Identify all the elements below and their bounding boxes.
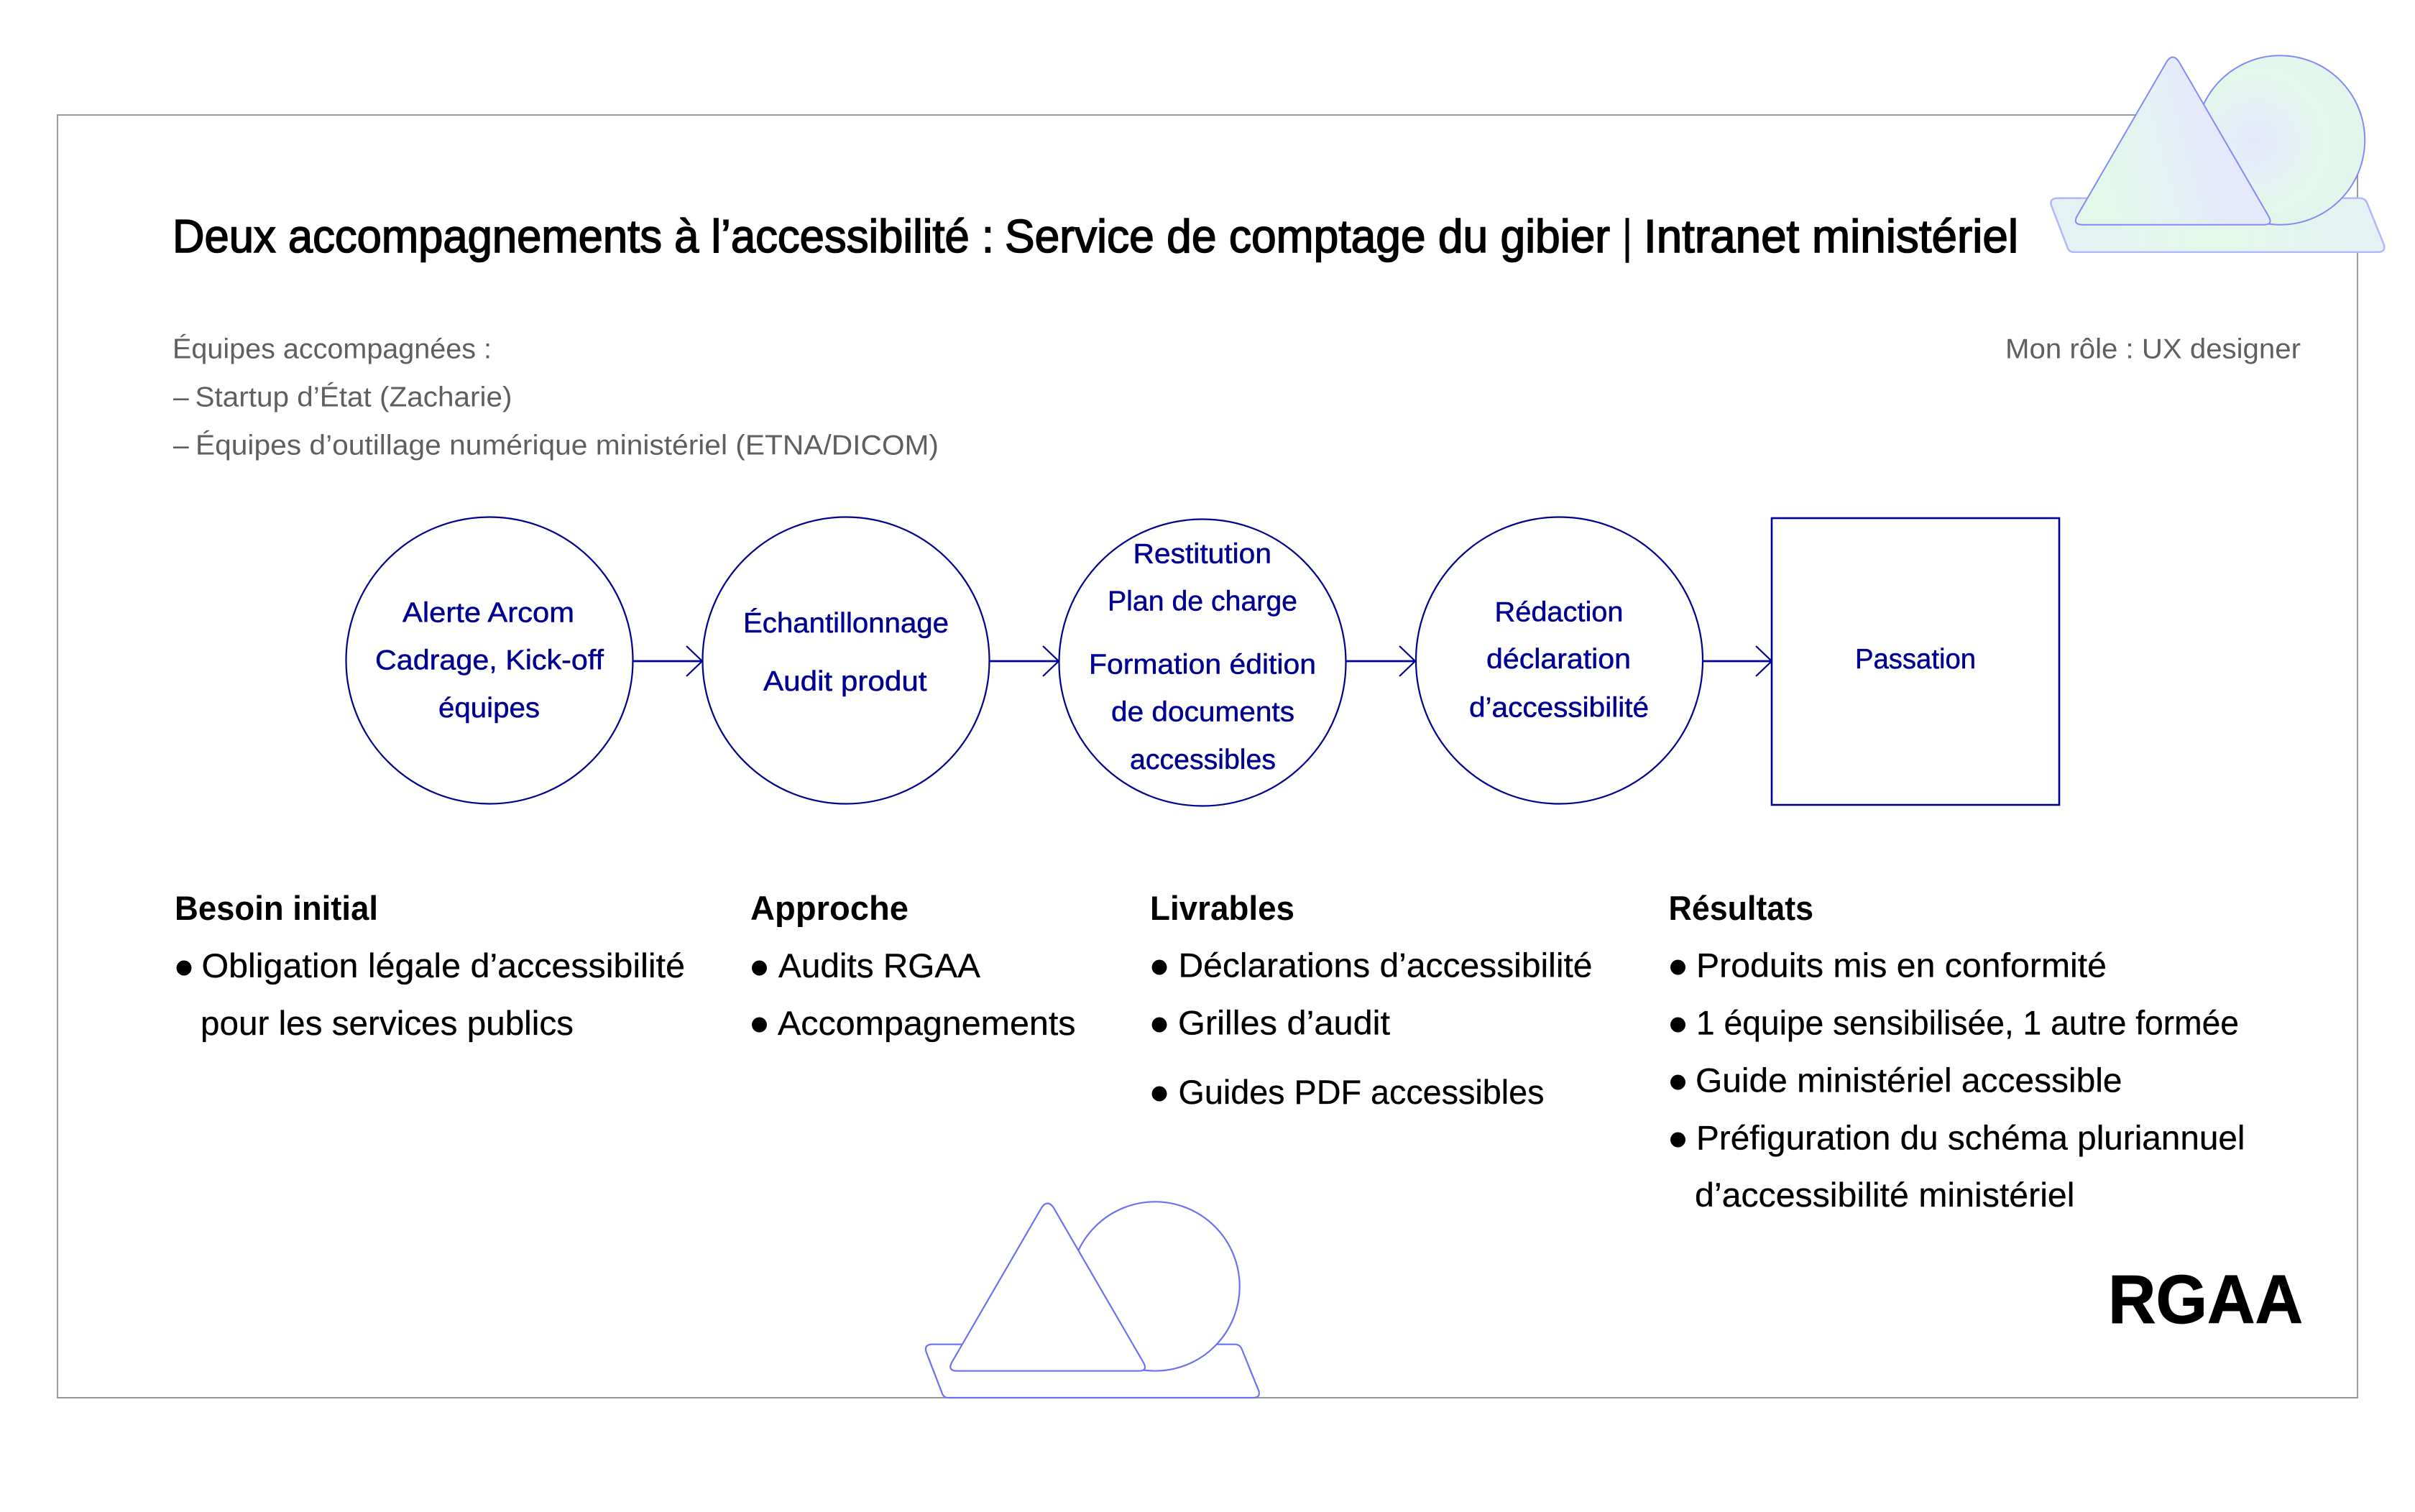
step 4: redaction: déclaration xyxy=(1486,644,1631,675)
step 3: restitution: Formation édition xyxy=(1089,650,1316,680)
column: livrables xyxy=(1150,889,1593,1111)
title: Intranet ministériel xyxy=(1644,210,2018,262)
title: Deux accompagnements à l’accessibilité : xyxy=(172,210,994,262)
process flow xyxy=(346,517,2059,806)
step 2: audit: Audit produt xyxy=(763,666,927,697)
step 3: restitution: Restitution xyxy=(1133,539,1271,569)
list: besoin initial xyxy=(177,946,685,1042)
title: Service de comptage du gibier xyxy=(1005,210,1610,262)
column: besoin initial xyxy=(175,889,685,1042)
arrow 2 xyxy=(990,646,1059,676)
list: resultats xyxy=(1670,946,2245,1214)
step 1: alerte: Alerte Arcom xyxy=(402,598,574,628)
RGAA label: RGAA xyxy=(2108,1261,2303,1338)
step 5: passation xyxy=(1772,518,2059,805)
list: resultats: 1 équipe sensibilisée, 1 autre formée xyxy=(1696,1003,2239,1042)
arrow 1 xyxy=(633,646,702,676)
step 5: passation: Passation xyxy=(1855,644,1976,675)
list: livrables: Grilles d’audit xyxy=(1178,1003,1390,1042)
list: resultats: d’accessibilité ministériel xyxy=(1695,1176,2074,1214)
step 3: restitution: accessibles xyxy=(1130,745,1276,775)
teams text block: Équipes d’outillage numérique ministériel (ETNA/DICOM) xyxy=(196,430,939,461)
list: besoin initial: pour les services publics xyxy=(201,1004,574,1042)
list: approche: Audits RGAA xyxy=(778,946,981,985)
column: approche xyxy=(750,889,1075,1042)
list: approche: Accompagnements xyxy=(778,1004,1075,1042)
icon: outlined shapes bottom centre xyxy=(926,1202,1259,1398)
title xyxy=(172,210,2018,262)
list: besoin initial: Obligation légale d’accessibilité xyxy=(201,946,685,985)
teams text block: Startup d’État (Zacharie) xyxy=(196,382,512,412)
teams text block xyxy=(172,333,939,461)
teams text block: Équipes accompagnées : xyxy=(172,333,492,365)
title: | xyxy=(1623,210,1632,262)
list: approche xyxy=(752,946,1075,1042)
list: resultats: Guide ministériel accessible xyxy=(1696,1061,2122,1100)
list: livrables: Déclarations d’accessibilité xyxy=(1179,946,1593,985)
list: resultats: Produits mis en conformité xyxy=(1696,946,2107,985)
list: resultats: Préfiguration du schéma pluriannuel xyxy=(1696,1118,2245,1157)
step 3: restitution: de documents xyxy=(1111,697,1294,727)
step 1: alerte: équipes xyxy=(438,693,540,724)
heading: besoin initial: Besoin initial xyxy=(175,889,378,927)
list: livrables: Guides PDF accessibles xyxy=(1179,1073,1544,1111)
step 3: restitution: Plan de charge xyxy=(1108,586,1297,617)
heading: livrables: Livrables xyxy=(1150,889,1294,927)
step 2: audit xyxy=(703,517,989,803)
teams text block: – xyxy=(173,430,189,461)
list: livrables xyxy=(1151,946,1593,1111)
arrow 4 xyxy=(1703,646,1772,676)
role text: Mon rôle : UX designer xyxy=(2005,333,2301,365)
step 2: audit: Échantillonnage xyxy=(743,608,949,639)
step 1: alerte xyxy=(346,517,632,803)
teams text block: – xyxy=(173,382,189,412)
step 3: restitution xyxy=(1059,519,1346,806)
heading: approche: Approche xyxy=(750,889,908,927)
step 4: redaction: Rédaction xyxy=(1495,596,1623,628)
icon: tinted shapes top right xyxy=(2051,55,2384,252)
heading: resultats: Résultats xyxy=(1669,889,1813,927)
step 1: alerte: Cadrage, Kick-off xyxy=(375,645,604,676)
step 4: redaction: d’accessibilité xyxy=(1469,693,1649,723)
arrow 3 xyxy=(1346,646,1415,676)
step 4: redaction xyxy=(1416,517,1703,803)
column: resultats xyxy=(1669,889,2245,1214)
